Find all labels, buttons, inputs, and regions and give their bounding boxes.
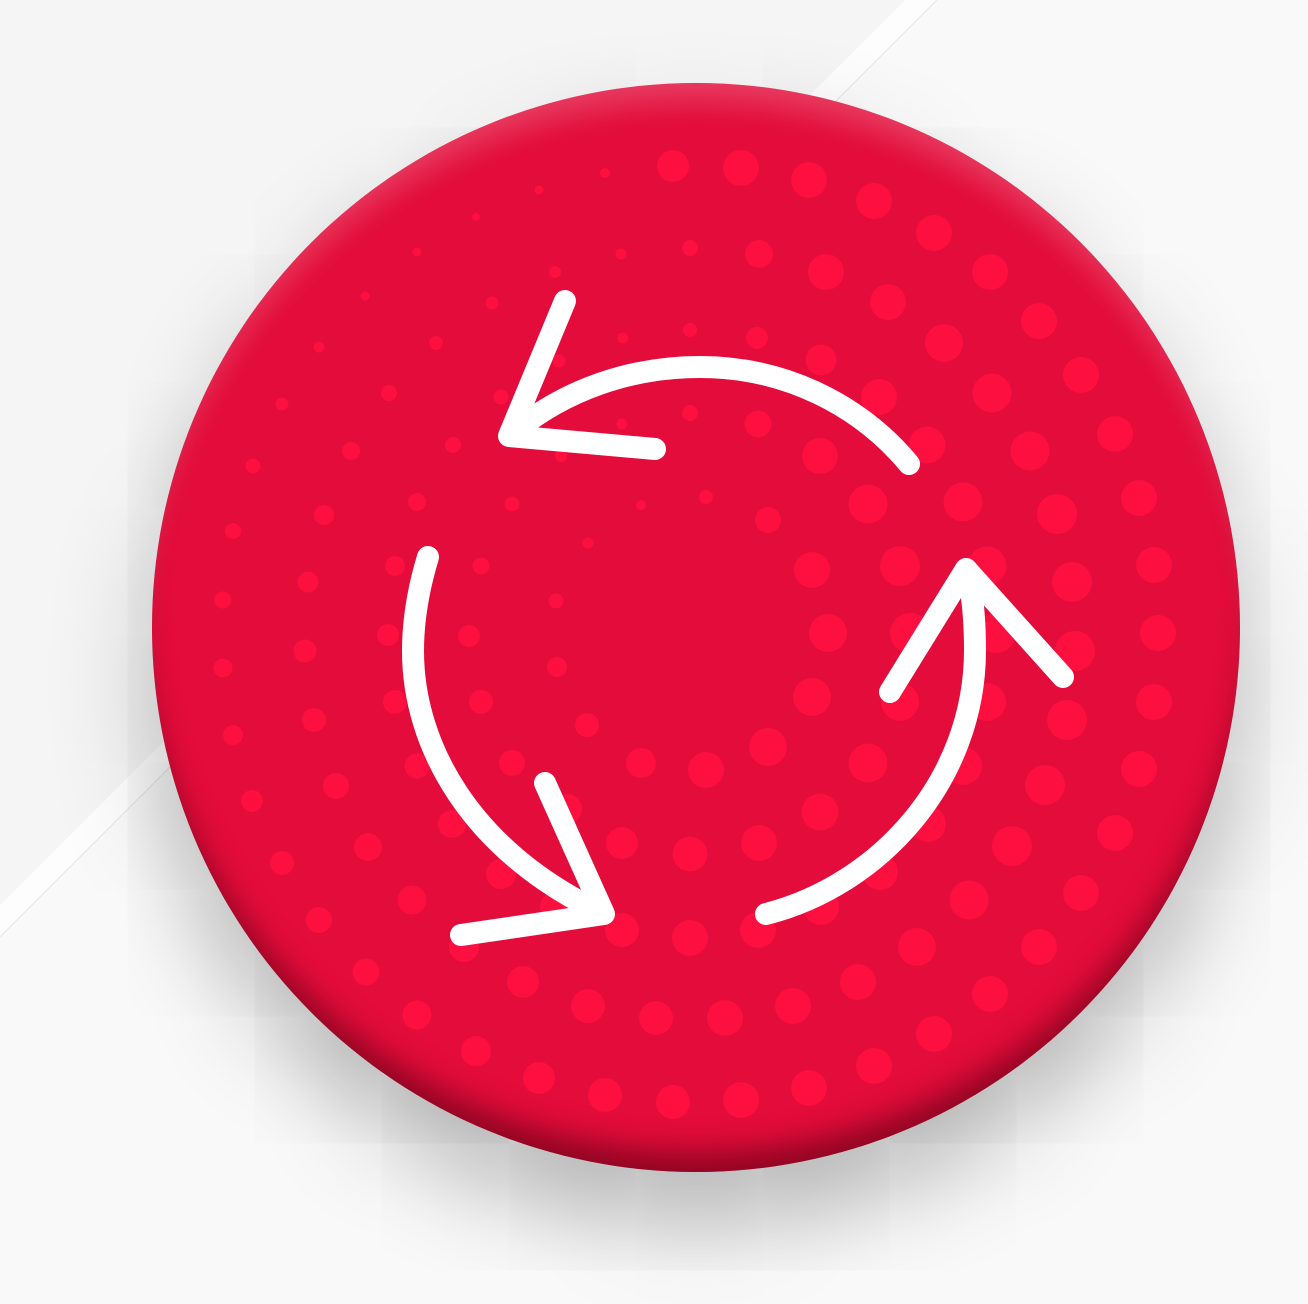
arrow: top, pointing left [509, 301, 909, 464]
arrow: right, pointing up [766, 569, 1063, 914]
cycle arrows [413, 301, 1063, 935]
dot pattern: concentric rings [214, 150, 1176, 1119]
arrow: left, pointing down-right [413, 557, 604, 935]
red circular badge [152, 83, 1240, 1172]
